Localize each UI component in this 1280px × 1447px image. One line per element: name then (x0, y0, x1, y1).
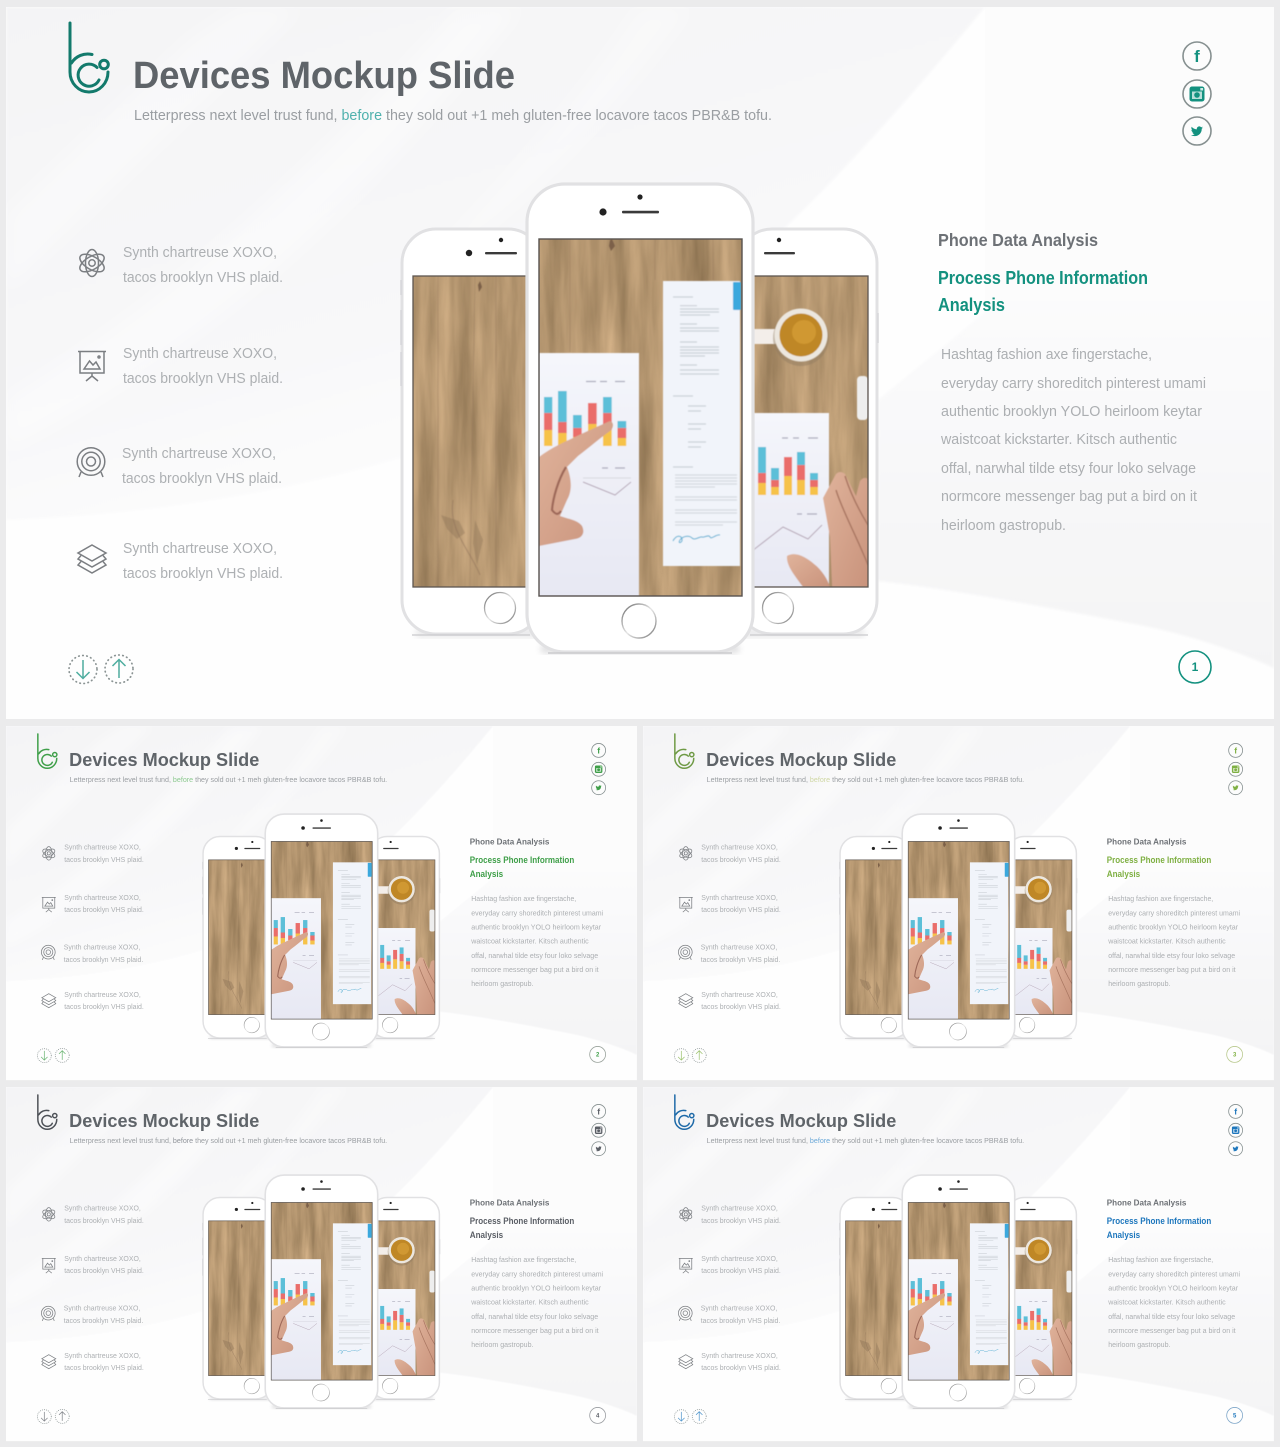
feature 2: Synth chartreuse XOXO, (64, 893, 141, 902)
feature 2: Synth chartreuse XOXO, (123, 346, 277, 362)
heading block (470, 836, 574, 879)
feature 3: Synth chartreuse XOXO, (701, 1303, 777, 1312)
feature 2: tacos brooklyn VHS plaid. (64, 905, 144, 914)
feature 4: tacos brooklyn VHS plaid. (64, 1002, 144, 1011)
body text: offal, narwhal tilde etsy four loko selvage (471, 951, 598, 960)
subtitle: Letterpress next level trust fund, before they sold out +1 meh gluten-free locavore tacos PBR&B tofu. (70, 1136, 387, 1145)
feature 3: tacos brooklyn VHS plaid. (122, 471, 282, 487)
heading block: Analysis (470, 1230, 503, 1240)
feature 1: Synth chartreuse XOXO, (701, 842, 778, 851)
body text: normcore messenger bag put a bird on it (1108, 1326, 1236, 1335)
body text (470, 894, 604, 988)
body text: normcore messenger bag put a bird on it (941, 489, 1197, 505)
body text: heirloom gastropub. (941, 518, 1066, 534)
heading block: Process Phone Information (1107, 855, 1211, 865)
body text: normcore messenger bag put a bird on it (471, 1326, 599, 1335)
navigation arrows (37, 1048, 69, 1063)
phone mockups (401, 184, 878, 654)
heading block: Analysis (938, 295, 1005, 315)
feature 4 (679, 1351, 781, 1372)
feature 3: Synth chartreuse XOXO, (122, 446, 276, 462)
body text: authentic brooklyn YOLO heirloom keytar (1108, 923, 1239, 932)
body text (1107, 894, 1241, 988)
feature 2 (42, 893, 144, 914)
body text: authentic brooklyn YOLO heirloom keytar (1108, 1284, 1239, 1293)
body text: normcore messenger bag put a bird on it (1108, 965, 1236, 974)
body text: heirloom gastropub. (471, 1340, 533, 1349)
heading block (938, 230, 1148, 315)
feature 2: Synth chartreuse XOXO, (64, 1254, 141, 1263)
feature 2 (679, 1254, 781, 1275)
social icons (1229, 1104, 1243, 1156)
slide background (643, 1087, 1274, 1441)
title: Devices Mockup Slide (706, 1111, 896, 1132)
social icons (592, 743, 606, 795)
social icons: f (1194, 47, 1200, 66)
feature 1: tacos brooklyn VHS plaid. (701, 855, 781, 864)
heading block (470, 1197, 574, 1240)
body text: Hashtag fashion axe fingerstache, (1108, 894, 1213, 903)
feature 4: tacos brooklyn VHS plaid. (123, 566, 283, 582)
navigation arrows (674, 1048, 706, 1063)
feature 1 (41, 842, 144, 864)
body text: normcore messenger bag put a bird on it (471, 965, 599, 974)
body text: waistcoat kickstarter. Kitsch authentic (470, 936, 589, 945)
body text: offal, narwhal tilde etsy four loko selvage (471, 1312, 598, 1321)
feature 4 (78, 541, 283, 582)
feature 1: Synth chartreuse XOXO, (123, 245, 277, 261)
feature 2 (679, 893, 781, 914)
page number: 4 (596, 1413, 600, 1419)
phone mockups (203, 1175, 440, 1409)
page number (1179, 651, 1211, 683)
page number: 1 (1192, 660, 1199, 674)
feature 1 (77, 245, 283, 286)
feature 3: tacos brooklyn VHS plaid. (64, 1316, 143, 1325)
social icons (592, 1104, 606, 1156)
feature 1 (41, 1203, 144, 1225)
heading block: Phone Data Analysis (1107, 836, 1187, 846)
body text: heirloom gastropub. (1108, 979, 1170, 988)
feature 2 (78, 346, 283, 387)
heading block: Process Phone Information (1107, 1216, 1211, 1226)
feature 3 (678, 942, 780, 964)
body text: offal, narwhal tilde etsy four loko selvage (941, 461, 1196, 477)
navigation arrows (69, 655, 133, 684)
phone mockups (840, 814, 1077, 1048)
panel: main slide 1 (6, 7, 1274, 719)
feature 2: tacos brooklyn VHS plaid. (701, 1266, 781, 1275)
social icons: f (597, 1106, 600, 1116)
title: Devices Mockup Slide (706, 750, 896, 771)
body text: authentic brooklyn YOLO heirloom keytar (471, 1284, 602, 1293)
feature 1: tacos brooklyn VHS plaid. (123, 270, 283, 286)
body text: heirloom gastropub. (471, 979, 533, 988)
body text: everyday carry shoreditch pinterest umami (471, 1270, 604, 1279)
feature 4: tacos brooklyn VHS plaid. (701, 1363, 781, 1372)
feature 3 (77, 446, 282, 487)
social icons (1183, 42, 1211, 145)
body text: waistcoat kickstarter. Kitsch authentic (470, 1297, 589, 1306)
icon: logo (38, 1095, 57, 1129)
heading block: Analysis (470, 869, 503, 879)
phone mockups (840, 1175, 1077, 1409)
body text (940, 347, 1206, 534)
subtitle: Letterpress next level trust fund, before they sold out +1 meh gluten-free locavore tacos PBR&B tofu. (134, 108, 772, 124)
feature list (678, 1203, 781, 1372)
heading block: Process Phone Information (470, 1216, 574, 1226)
feature 3 (678, 1303, 780, 1325)
body text: waistcoat kickstarter. Kitsch authentic (1107, 936, 1226, 945)
feature 4: tacos brooklyn VHS plaid. (64, 1363, 144, 1372)
body text (470, 1255, 604, 1349)
heading block: Phone Data Analysis (470, 1197, 550, 1207)
panel: thumbnail slide 2 (6, 726, 637, 1080)
body text: heirloom gastropub. (1108, 1340, 1170, 1349)
subtitle: Letterpress next level trust fund, before they sold out +1 meh gluten-free locavore tacos PBR&B tofu. (70, 775, 387, 784)
feature 1: tacos brooklyn VHS plaid. (64, 855, 144, 864)
feature 3 (41, 942, 143, 964)
icon: logo (70, 23, 108, 92)
page number (590, 1407, 606, 1423)
subtitle: Letterpress next level trust fund, before they sold out +1 meh gluten-free locavore tacos PBR&B tofu. (707, 775, 1024, 784)
heading block: Phone Data Analysis (470, 836, 550, 846)
slide background (643, 726, 1274, 1080)
feature 1: Synth chartreuse XOXO, (64, 1203, 141, 1212)
body text: Hashtag fashion axe fingerstache, (471, 894, 576, 903)
page number (590, 1046, 606, 1062)
feature 3: tacos brooklyn VHS plaid. (701, 1316, 780, 1325)
feature 1: tacos brooklyn VHS plaid. (64, 1216, 144, 1225)
feature 4: Synth chartreuse XOXO, (701, 990, 778, 999)
heading block: Analysis (1107, 1230, 1140, 1240)
feature 4 (42, 1351, 144, 1372)
body text: waistcoat kickstarter. Kitsch authentic (940, 432, 1177, 448)
feature 3: Synth chartreuse XOXO, (701, 942, 777, 951)
icon: logo (38, 734, 57, 768)
navigation arrows (674, 1409, 706, 1424)
feature 1: Synth chartreuse XOXO, (701, 1203, 778, 1212)
body text: Hashtag fashion axe fingerstache, (941, 347, 1152, 363)
feature 2: tacos brooklyn VHS plaid. (123, 371, 283, 387)
navigation arrows (37, 1409, 69, 1424)
title: Devices Mockup Slide (69, 750, 259, 771)
body text: everyday carry shoreditch pinterest umami (471, 909, 604, 918)
icon: logo (675, 734, 694, 768)
feature 2 (42, 1254, 144, 1275)
page number: 5 (1233, 1413, 1237, 1419)
feature 4: Synth chartreuse XOXO, (64, 990, 141, 999)
body text (1107, 1255, 1241, 1349)
feature 4 (42, 990, 144, 1011)
feature 3: Synth chartreuse XOXO, (64, 1303, 140, 1312)
body text: Hashtag fashion axe fingerstache, (1108, 1255, 1213, 1264)
social icons: f (1234, 1106, 1237, 1116)
body text: waistcoat kickstarter. Kitsch authentic (1107, 1297, 1226, 1306)
feature 4: Synth chartreuse XOXO, (123, 541, 277, 557)
feature 3: tacos brooklyn VHS plaid. (64, 955, 143, 964)
feature 2: Synth chartreuse XOXO, (701, 1254, 778, 1263)
slide background (6, 726, 637, 1080)
feature 4: tacos brooklyn VHS plaid. (701, 1002, 781, 1011)
subtitle: Letterpress next level trust fund, before they sold out +1 meh gluten-free locavore tacos PBR&B tofu. (707, 1136, 1024, 1145)
page number (1227, 1046, 1243, 1062)
page number: 3 (1233, 1052, 1237, 1058)
feature 3 (41, 1303, 143, 1325)
body text: offal, narwhal tilde etsy four loko selvage (1108, 1312, 1235, 1321)
phone mockups (203, 814, 440, 1048)
social icons (1229, 743, 1243, 795)
heading block (1107, 1197, 1211, 1240)
page number (1227, 1407, 1243, 1423)
icon: logo (675, 1095, 694, 1129)
feature list (41, 842, 144, 1011)
feature 2: tacos brooklyn VHS plaid. (64, 1266, 144, 1275)
social icons: f (597, 745, 600, 755)
panel: thumbnail slide 3 (643, 726, 1274, 1080)
feature 2: Synth chartreuse XOXO, (701, 893, 778, 902)
social icons: f (1234, 745, 1237, 755)
heading block: Phone Data Analysis (938, 230, 1098, 250)
heading block: Process Phone Information (938, 268, 1148, 288)
panel: thumbnail slide 4 (6, 1087, 637, 1441)
panel: thumbnail slide 5 (643, 1087, 1274, 1441)
body text: everyday carry shoreditch pinterest umami (1108, 909, 1241, 918)
heading block: Phone Data Analysis (1107, 1197, 1187, 1207)
heading block: Analysis (1107, 869, 1140, 879)
feature 1: tacos brooklyn VHS plaid. (701, 1216, 781, 1225)
feature 4 (679, 990, 781, 1011)
feature 1: Synth chartreuse XOXO, (64, 842, 141, 851)
body text: authentic brooklyn YOLO heirloom keytar (941, 404, 1202, 420)
feature 2: tacos brooklyn VHS plaid. (701, 905, 781, 914)
slide background (6, 7, 1274, 719)
page number: 2 (596, 1052, 600, 1058)
feature 4: Synth chartreuse XOXO, (701, 1351, 778, 1360)
heading block: Process Phone Information (470, 855, 574, 865)
feature list (678, 842, 781, 1011)
body text: everyday carry shoreditch pinterest umami (1108, 1270, 1241, 1279)
feature 3: tacos brooklyn VHS plaid. (701, 955, 780, 964)
slide background (6, 1087, 637, 1441)
body text: Hashtag fashion axe fingerstache, (471, 1255, 576, 1264)
feature 3: Synth chartreuse XOXO, (64, 942, 140, 951)
title: Devices Mockup Slide (133, 55, 515, 97)
heading block (1107, 836, 1211, 879)
title: Devices Mockup Slide (69, 1111, 259, 1132)
body text: everyday carry shoreditch pinterest umami (941, 376, 1206, 392)
body text: authentic brooklyn YOLO heirloom keytar (471, 923, 602, 932)
feature 4: Synth chartreuse XOXO, (64, 1351, 141, 1360)
feature 1 (678, 842, 781, 864)
body text: offal, narwhal tilde etsy four loko selvage (1108, 951, 1235, 960)
feature list (41, 1203, 144, 1372)
feature 1 (678, 1203, 781, 1225)
feature list (77, 245, 283, 582)
